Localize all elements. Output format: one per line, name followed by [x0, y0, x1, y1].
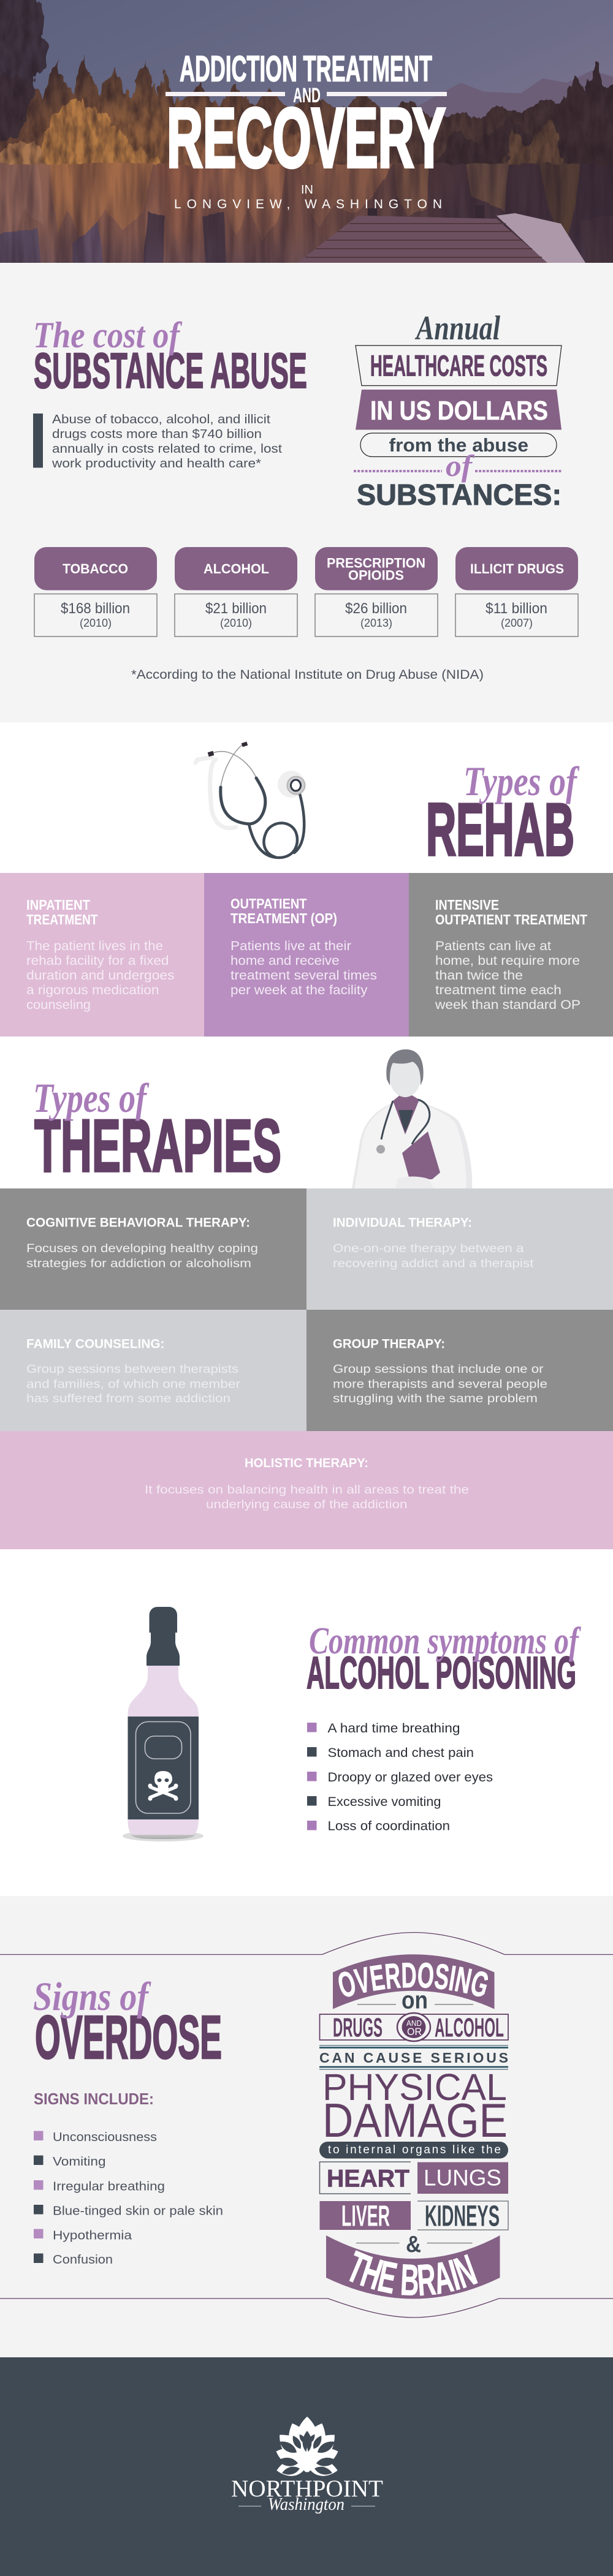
list: symptoms: Droopy or glazed over eyes — [327, 1770, 493, 1785]
wordmark: northpoint: NORTHPOINT — [231, 2476, 383, 2502]
wordmark: washington: Washington — [268, 2495, 345, 2514]
card: illicit drugs: $11 billion — [485, 600, 547, 617]
card: holistic therapy: underlying cause of the addiction — [206, 1498, 407, 1511]
frame line bottom — [0, 2298, 613, 2317]
box: lungs: LUNGS — [424, 2165, 501, 2191]
list: overdose signs — [34, 2131, 223, 2267]
box: kidneys: KIDNEYS — [425, 2200, 500, 2232]
icon: doctor — [352, 1049, 472, 1188]
card: cognitive behavioral therapy: COGNITIVE BEHAVIORAL THERAPY: — [26, 1215, 250, 1230]
text band: can cause serious: CAN CAUSE SERIOUS — [319, 2050, 508, 2066]
card: intensive outpatient treatment: treatment time each — [435, 983, 562, 997]
card: individual therapy — [306, 1188, 613, 1310]
card: inpatient treatment: TREATMENT — [26, 912, 98, 927]
box: drugs and or alcohol: ALCOHOL — [435, 2013, 504, 2042]
card: prescription opioids: $26 billion — [345, 600, 407, 617]
word: damage: DAMAGE — [322, 2093, 508, 2147]
card: intensive outpatient treatment: OUTPATIENT TREATMENT — [435, 912, 587, 927]
text: from the abuse: from the abuse — [389, 434, 528, 456]
title: and: AND — [293, 84, 321, 107]
card: outpatient treatment: per week at the facility — [230, 983, 368, 997]
box: heart: HEART — [327, 2165, 409, 2192]
list: overdose signs: Irregular breathing — [53, 2180, 165, 2193]
box: drugs and or alcohol: AND — [406, 2019, 422, 2028]
card: alcohol — [175, 547, 297, 636]
banner: overdosing: OVERDOSING — [338, 1963, 488, 1997]
text band: can cause serious — [319, 2045, 508, 2069]
panel: signs of overdose — [0, 1896, 613, 2357]
card: illicit drugs: (2007) — [501, 617, 533, 629]
title: addiction treatment: ADDICTION TREATMENT — [180, 49, 432, 89]
filled banner — [356, 390, 562, 430]
card: cognitive behavioral therapy: Focuses on developing healthy coping — [26, 1242, 258, 1255]
card: cognitive behavioral therapy: strategies for addiction or alcoholism — [26, 1257, 251, 1271]
card: family counseling: FAMILY COUNSELING: — [26, 1337, 164, 1351]
card: individual therapy: recovering addict and a therapist — [333, 1257, 534, 1271]
subheading: signs include: SIGNS INCLUDE: — [34, 2090, 154, 2108]
card: family counseling: and families, of which one member — [26, 1377, 241, 1391]
pill: to internal organs like the: to internal organs like the — [328, 2144, 501, 2156]
box: drugs and or alcohol: DRUGS — [333, 2013, 383, 2042]
subtitle: location: LONGVIEW, WASHINGTON — [174, 197, 442, 211]
card: family counseling: has suffered from some addiction — [26, 1392, 230, 1405]
card: illicit drugs — [455, 547, 578, 636]
card: inpatient treatment: rehab facility for a fixed — [26, 954, 169, 968]
panel: alcohol poisoning — [123, 1607, 581, 1841]
title rule right — [327, 92, 447, 96]
title rule left — [166, 92, 285, 96]
card: group therapy: Group sessions that include one or — [333, 1362, 544, 1376]
outlined banner — [356, 346, 562, 386]
card: intensive outpatient treatment: week than standard OP — [435, 998, 581, 1012]
intro paragraph: Abuse of tobacco, alcohol, and illicit — [52, 413, 270, 426]
subtitle: in: IN — [301, 183, 313, 197]
card: tobacco: $168 billion — [61, 600, 130, 617]
card: prescription opioids — [315, 547, 438, 636]
list: overdose signs: Unconsciousness — [53, 2131, 157, 2144]
list: symptoms — [307, 1721, 493, 1833]
panel: types of rehab — [0, 722, 613, 1037]
script: annual: Annual — [415, 309, 500, 347]
card: intensive outpatient treatment: home, but require more — [435, 954, 580, 968]
lockup: annual healthcare costs — [354, 309, 562, 512]
card: group therapy: struggling with the same problem — [333, 1392, 538, 1405]
ampersand: & — [406, 2232, 421, 2257]
pill: to internal organs like the — [319, 2142, 508, 2159]
banner: the brain: THE BRAIN — [349, 2250, 478, 2296]
card: holistic therapy: HOLISTIC THERAPY: — [245, 1456, 368, 1470]
card: tobacco: TOBACCO — [63, 561, 128, 576]
card: intensive outpatient treatment: than twice the — [435, 969, 523, 983]
card: family counseling — [0, 1310, 306, 1431]
list: overdose signs: Vomiting — [53, 2155, 105, 2169]
card: alcohol: ALCOHOL — [204, 561, 269, 576]
card: group therapy: GROUP THERAPY: — [333, 1337, 445, 1351]
list: symptoms: A hard time breathing — [327, 1721, 460, 1736]
card: group therapy: more therapists and several people — [333, 1377, 547, 1391]
card: tobacco — [34, 547, 157, 636]
intro paragraph: drugs costs more than $740 billion — [52, 428, 262, 441]
card: illicit drugs: ILLICIT DRUGS — [470, 561, 564, 576]
card: outpatient treatment: OUTPATIENT — [230, 896, 306, 912]
quote bar — [33, 414, 43, 468]
text: substances: SUBSTANCES: — [357, 479, 562, 512]
icon: skull and crossbones — [148, 1771, 178, 1801]
heading: substance abuse: SUBSTANCE ABUSE — [34, 343, 307, 399]
icon: poison bottle — [123, 1607, 204, 1841]
box: liver: LIVER — [341, 2200, 390, 2232]
card: tobacco: (2010) — [80, 617, 112, 629]
box: kidneys — [417, 2200, 508, 2232]
heading script: types of: Types of — [33, 1075, 150, 1121]
card: alcohol: $21 billion — [205, 600, 267, 617]
heading script: the cost of: The cost of — [33, 315, 182, 355]
list: symptoms: Loss of coordination — [327, 1819, 450, 1833]
frame line top — [0, 1932, 613, 1954]
card: intensive outpatient treatment — [409, 873, 613, 1037]
card: outpatient treatment: home and receive — [230, 954, 340, 968]
word: physical: PHYSICAL — [322, 2066, 507, 2108]
script: of: of — [446, 448, 474, 483]
box: lungs — [417, 2162, 508, 2194]
card: outpatient treatment — [204, 873, 409, 1037]
intro paragraph — [51, 413, 282, 470]
panel: cost of substance abuse — [0, 263, 613, 722]
card: intensive outpatient treatment: Patients can live at — [435, 939, 551, 953]
logo: northpoint peacock — [273, 2417, 341, 2479]
card: prescription opioids: (2013) — [360, 617, 392, 629]
pill outline — [360, 433, 557, 457]
intro paragraph: annually in costs related to crime, lost — [52, 442, 282, 456]
list: overdose signs: Hypothermia — [53, 2229, 132, 2242]
list: overdose signs: Blue-tinged skin or pale skin — [53, 2204, 223, 2218]
intro paragraph: work productivity and health care* — [51, 457, 261, 470]
list: symptoms: Excessive vomiting — [327, 1795, 441, 1809]
box: liver — [320, 2200, 411, 2232]
card: prescription opioids: OPIOIDS — [348, 567, 404, 583]
dotted rule — [354, 470, 562, 472]
footer — [0, 2357, 613, 2576]
heading script: types of: Types of — [463, 758, 580, 804]
card: outpatient treatment: treatment several times — [230, 969, 377, 983]
card: holistic therapy: It focuses on balancing health in all areas to treat the — [145, 1483, 469, 1497]
box: drugs and or alcohol — [320, 2013, 508, 2042]
icon: stethoscope — [196, 742, 305, 858]
card: alcohol: (2010) — [220, 617, 252, 629]
card: inpatient treatment: duration and undergoes — [26, 969, 174, 983]
card: family counseling: Group sessions between therapists — [26, 1362, 238, 1376]
badge: overdosing damage typography — [319, 1954, 509, 2298]
list: symptoms: Stomach and chest pain — [327, 1746, 474, 1760]
card: prescription opioids: PRESCRIPTION — [327, 555, 425, 571]
hero banner — [0, 0, 613, 288]
card: individual therapy: INDIVIDUAL THERAPY: — [333, 1215, 472, 1230]
text: in us dollars: IN US DOLLARS — [370, 396, 548, 426]
panel: types of therapies — [0, 1049, 613, 1549]
heading: overdose: OVERDOSE — [35, 2003, 222, 2072]
card: inpatient treatment: The patient lives in the — [26, 939, 163, 953]
footnote: *According to the National Institute on Drug Abuse (NIDA) — [131, 668, 484, 682]
card: outpatient treatment: Patients live at their — [230, 939, 351, 953]
list: overdose signs: Confusion — [53, 2253, 113, 2267]
hero photo: lake and forest — [0, 0, 613, 288]
box: drugs and or alcohol: OR — [407, 2026, 422, 2038]
word: on: on — [402, 1987, 428, 2014]
card: group therapy — [306, 1310, 613, 1431]
card: intensive outpatient treatment: INTENSIVE — [435, 897, 499, 913]
card: individual therapy: One-on-one therapy between a — [333, 1242, 524, 1255]
heading script: signs of: Signs of — [33, 1974, 151, 2019]
card: inpatient treatment: a rigorous medication — [26, 983, 159, 997]
heading: therapies: THERAPIES — [34, 1104, 281, 1187]
card: inpatient treatment: INPATIENT — [26, 897, 90, 913]
card: inpatient treatment: counseling — [26, 998, 91, 1012]
card: cognitive behavioral therapy — [0, 1188, 306, 1310]
card: inpatient treatment — [0, 873, 205, 1037]
card: outpatient treatment: TREATMENT (OP) — [230, 910, 337, 926]
card: holistic therapy — [0, 1431, 613, 1549]
